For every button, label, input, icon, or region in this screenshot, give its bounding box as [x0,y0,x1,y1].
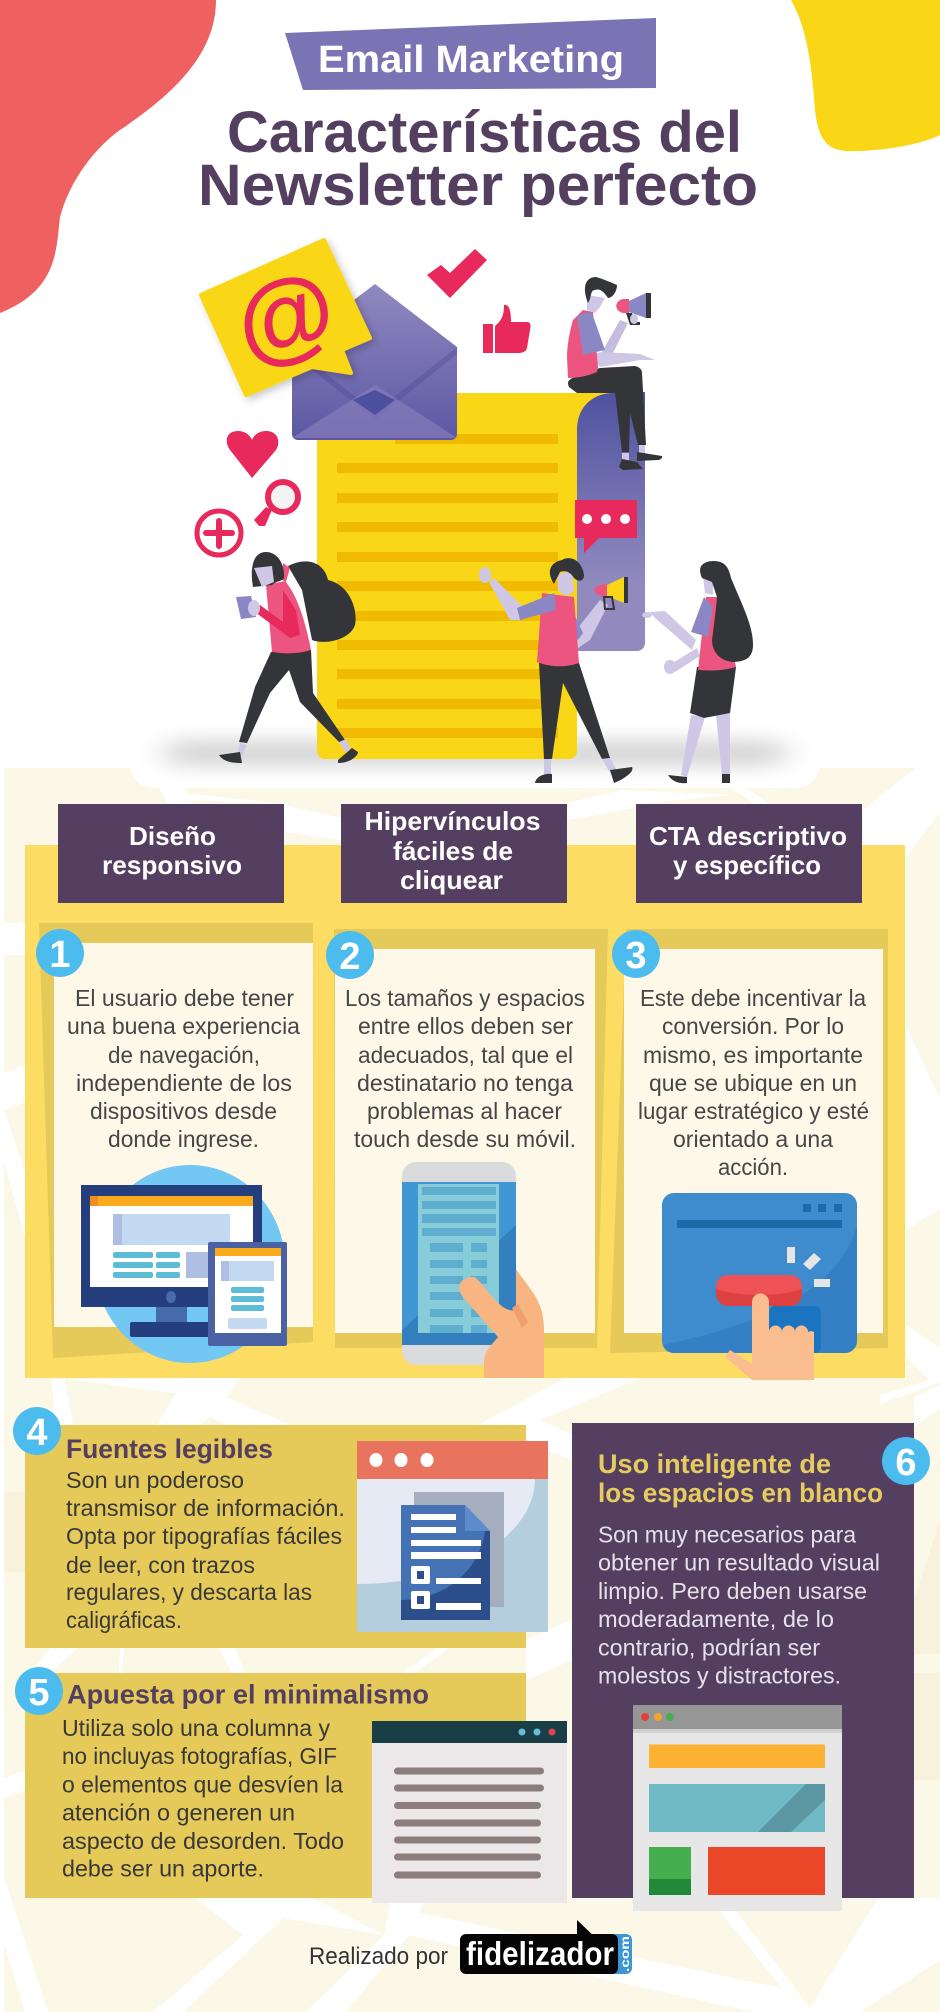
card 3 text: Este debe incentivar la [640,985,866,1011]
card 3 text: conversión. Por lo [662,1013,844,1039]
panel 4 text: regulares, y descarta las [66,1579,312,1605]
card 1 text: de navegación, [108,1042,260,1068]
icon: at-sign speech bubble [201,240,370,395]
main yellow panel [25,845,905,1378]
heading 6 [598,1449,883,1508]
card 2 text: problemas al hacer [367,1098,562,1124]
icon: minimal email window [372,1721,567,1903]
logo: fidelizador: fidelizador [466,1935,614,1972]
panel 4 text [66,1467,345,1633]
panel 6 text: limpio. Pero deben usarse [598,1578,867,1604]
person: woman with long hair [642,561,753,783]
panel 6 text: Son muy necesarios para [598,1522,856,1548]
person: man with megaphone [479,558,632,783]
banner: Email Marketing [285,18,656,90]
footer credit [309,1920,632,1974]
icon: heart [227,431,278,478]
icon: clean layout window [633,1705,842,1911]
person: woman with phone [219,552,358,763]
icon: document window [357,1441,548,1632]
megaphone [616,293,651,325]
card 2 text [345,985,585,1152]
heading 6: los espacios en blanco [598,1478,883,1508]
header: Hipervínculos fáciles de cliquear [341,804,567,903]
card 1 text: El usuario debe tener [75,985,294,1011]
icon: at-sign speech bubble: @ [224,250,346,382]
card 3 text: orientado a una [673,1126,833,1152]
icon: check mark [427,249,487,298]
panel 4 text: Son un poderoso [66,1467,244,1493]
badge 1: 1 [49,934,71,976]
card 2 text: touch desde su móvil. [354,1126,576,1152]
badge 5: 5 [28,1672,50,1714]
card 3 text: mismo, es importante [643,1042,863,1068]
heading 4: Fuentes legibles [66,1434,273,1464]
badge 6: 6 [895,1442,917,1484]
column 1: Diseño responsivo [36,804,313,1363]
panel 4 text: Opta por tipografías fáciles [66,1523,342,1549]
footer credit: Realizado por [309,1943,448,1970]
ground shadow [130,730,820,788]
panel 5 text [62,1715,344,1882]
card 1 text: una buena experiencia [67,1013,300,1039]
header: Diseño responsivo: responsivo [102,850,242,880]
column 2: Hipervínculos [326,804,608,1378]
panel 5 text: atención o generen un [62,1800,295,1826]
background: cream area with white streaks [0,767,940,2012]
red corner blob [0,0,216,313]
panel 6 text: obtener un resultado visual [598,1550,880,1576]
megaphone [594,577,628,609]
person: seated with megaphone [567,277,662,470]
heading 5: Apuesta por el minimalismo [67,1680,429,1710]
card 3 text [638,985,869,1180]
card 3 text: que se ubique en un [649,1070,857,1096]
icon: phone in hand [402,1162,544,1378]
card 3 text: lugar estratégico y esté [638,1098,869,1124]
header: CTA descriptivo y específico [636,804,862,903]
purple back panel [560,392,645,651]
card 1 [36,923,313,1363]
card 1 text: donde ingrese. [108,1126,259,1152]
icon: plus circle [197,511,241,555]
header: Hipervínculos fáciles de cliquear: cliquear [400,865,503,895]
badge 5 [15,1667,63,1715]
card 2 text: entre ellos deben ser [358,1013,573,1039]
header: Diseño responsivo: Diseño [129,821,216,851]
panel 4 text: de leer, con trazos [66,1552,255,1578]
icon: monitor and tablet [81,1165,287,1363]
panel 5 text: Utiliza solo una columna y [62,1715,330,1741]
logo: fidelizador: .com [618,1936,632,1972]
panel 6 text: contrario, podrían ser [598,1634,820,1660]
panel 4 text: transmisor de información. [66,1495,345,1521]
title [198,100,758,218]
heading 6: Uso inteligente de [598,1449,831,1479]
title: Características del [227,100,742,165]
header: Hipervínculos fáciles de cliquear: fáciles de [393,836,513,866]
panel 6: Uso inteligente de los espacios en blanco [572,1423,930,1911]
card 2 text: adecuados, tal que el [358,1042,573,1068]
badge 4 [13,1407,61,1455]
icon: speech bubble with dots [575,500,637,553]
panel 5 text: debe ser un aporte. [62,1856,264,1882]
panel 4 text: caligráficas. [66,1607,182,1633]
icon: thumbs up [483,305,531,353]
card 2 [326,929,608,1378]
icon: browser window with button and hand [662,1193,857,1380]
icon: magnifier [254,482,298,526]
card 1 text: independiente de los [76,1070,292,1096]
card 2 text: Los tamaños y espacios [345,985,585,1011]
banner: Email Marketing: Email Marketing [318,39,624,81]
badge 2: 2 [339,936,361,978]
yellow document [317,393,613,759]
badge 4: 4 [26,1412,48,1454]
panel 6 text [598,1522,880,1688]
card 3 text: acción. [718,1154,788,1180]
badge 3 [612,930,660,978]
panel 6 text: moderadamente, de lo [598,1606,834,1632]
header: Hipervínculos fáciles de cliquear: Hipervínculos [364,806,540,836]
yellow corner blob [791,0,940,151]
panel 4: Fuentes legibles [13,1407,548,1648]
column 3: CTA [610,804,888,1380]
title: Newsletter perfecto [198,153,758,218]
card 1 text [67,985,300,1152]
card 2 text: destinatario no tenga [357,1070,573,1096]
card 3 [610,929,888,1380]
illustration: people around a giant newsletter [130,240,820,788]
badge 1 [36,929,84,977]
panel 5 text: no incluyas fotografías, GIF [62,1743,337,1769]
header: CTA descriptivo y específico: y específico [673,850,821,880]
panel 5: Apuesta por el minimalismo [15,1667,567,1903]
badge 6 [882,1437,930,1485]
panel 5 text: aspecto de desorden. Todo [62,1828,344,1854]
logo: fidelizador [460,1920,632,1974]
panel 5 text: o elementos que desvíen la [62,1772,343,1798]
header: CTA descriptivo y específico: CTA descriptivo [649,821,847,851]
panel 6 text: molestos y distractores. [598,1662,841,1688]
header: Diseño responsivo [58,804,284,903]
envelope [292,284,457,440]
badge 3: 3 [625,935,647,977]
card 1 text: dispositivos desde [90,1098,277,1124]
badge 2 [326,931,374,979]
